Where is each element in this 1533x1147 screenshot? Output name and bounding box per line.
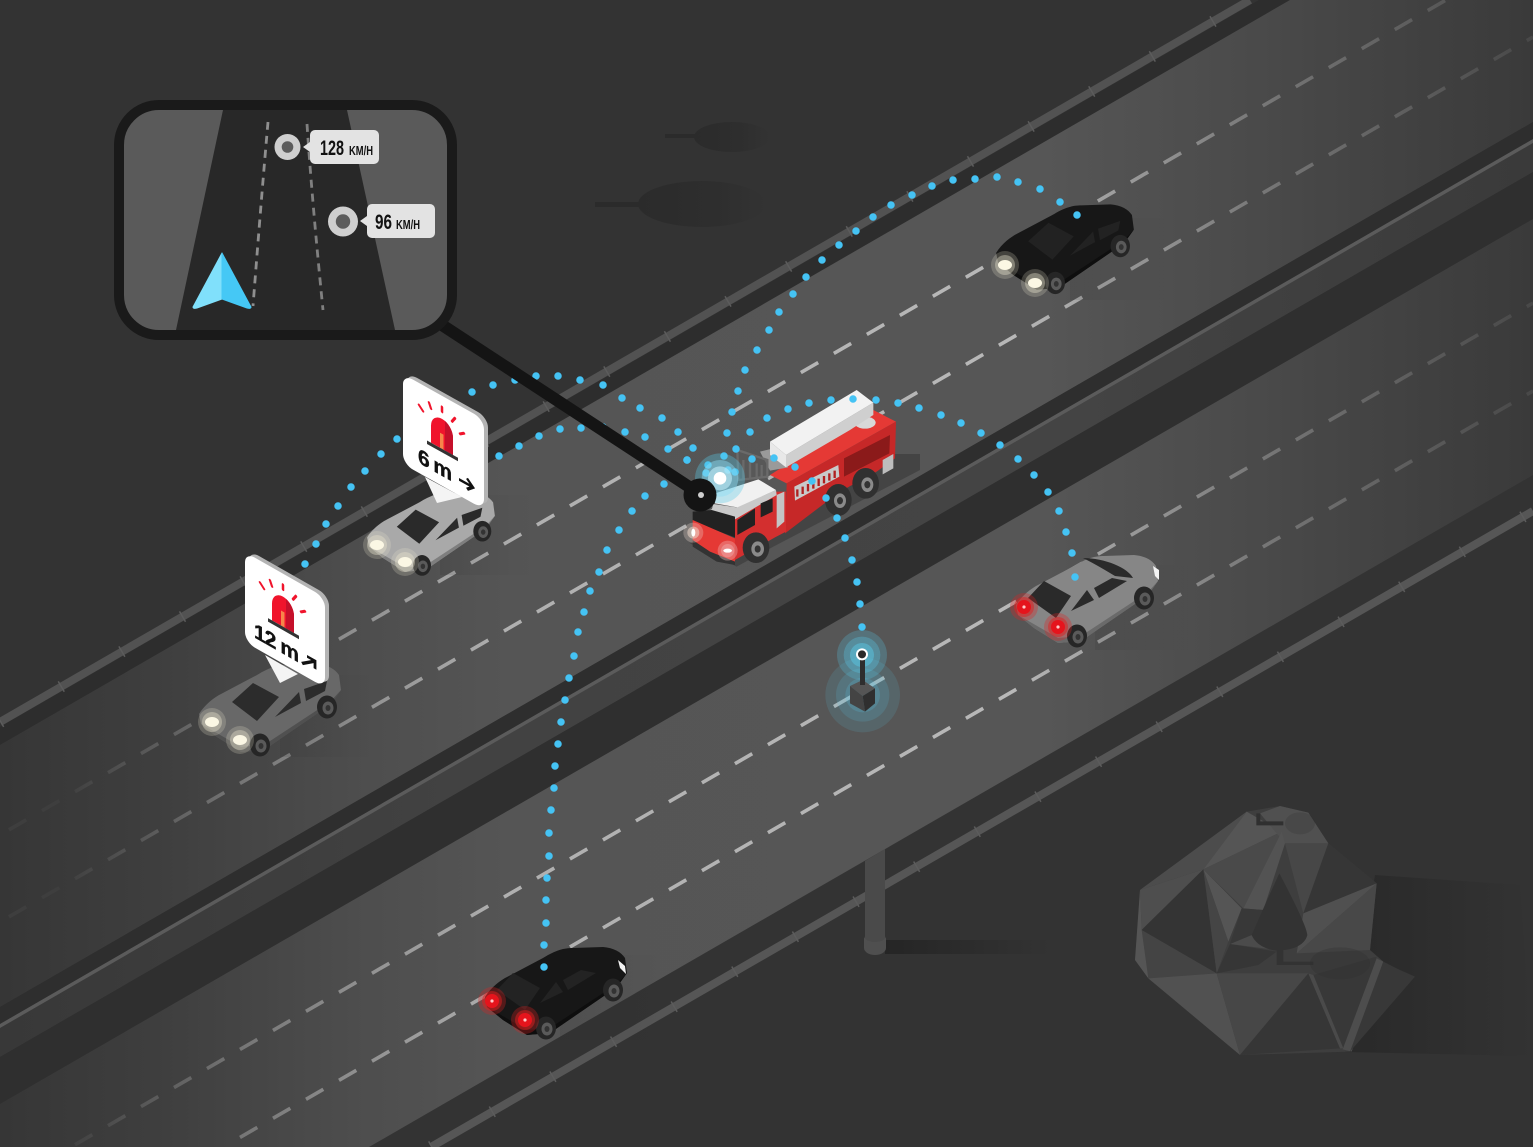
distance text: 6 m (418, 444, 452, 486)
dotted signal arc to antenna (735, 458, 862, 627)
mirror lane markings (253, 122, 268, 306)
cab roof (712, 490, 777, 519)
truck shadow (690, 454, 920, 567)
ladder (794, 465, 839, 501)
signal rings upper (837, 630, 887, 680)
direction arrow (302, 653, 315, 671)
navigation arrow (193, 253, 251, 308)
dotted signal arc to black car bottom (544, 460, 708, 967)
guard rail shadow band (0, 0, 1290, 745)
speed label 128 km/h (303, 130, 379, 164)
dotted signal arc to silver car under 6 m sign (499, 427, 706, 473)
truck emergency beacon glow (695, 453, 745, 503)
speed label 96 km/h (360, 204, 435, 238)
pointer (425, 477, 462, 503)
windscreen (693, 510, 735, 537)
car: silver with headlights, under 6 m sign (363, 492, 535, 576)
vehicle pin 96 (328, 206, 358, 236)
front wheel (743, 532, 769, 563)
bottom guard rail (431, 511, 1533, 1147)
speed label 96 km/h: 96 (375, 211, 392, 234)
top guard rail (0, 0, 1250, 722)
6 m alert sign (403, 370, 488, 512)
connector end point (684, 478, 716, 512)
direction arrow (459, 474, 473, 493)
truck headlights (683, 523, 738, 561)
vehicle pin 128 (274, 134, 300, 160)
side lockers (844, 435, 890, 477)
antenna roadside unit (825, 630, 900, 732)
dotted signal arc to grey car under 12 m sign (305, 376, 693, 564)
wheels (825, 468, 879, 516)
mirror road (176, 110, 395, 330)
body top (770, 410, 896, 483)
connector line from truck to mirror (442, 325, 700, 494)
cab front (693, 520, 735, 562)
boulder with tree silhouette (1135, 806, 1415, 1055)
door strip (777, 492, 784, 528)
dotted signal arc to silver car right (728, 399, 1075, 577)
tree shadows on the ground (595, 122, 770, 227)
boom arm (760, 390, 876, 471)
side windows (737, 508, 755, 535)
distance text: 12 m (254, 619, 299, 667)
car: black with headlights, top lane (991, 204, 1170, 300)
signal rings lower (825, 658, 900, 732)
body side (785, 422, 896, 533)
speed label 128 km/h: 128 (320, 137, 344, 160)
cab side (735, 492, 786, 560)
car: silver with tail lights, right lane (1010, 555, 1195, 650)
basket (737, 450, 767, 482)
fire truck (683, 390, 920, 567)
car: black with tail lights, bottom lane (478, 947, 665, 1040)
12 m alert sign (245, 548, 329, 690)
tree silhouette (1252, 873, 1313, 965)
speed label 96 km/h: KM/H (396, 218, 420, 232)
dotted signal arc to black car top (724, 177, 1077, 456)
speed label 128 km/h: KM/H (349, 144, 373, 158)
dashboard mirror display (119, 105, 452, 335)
car: grey with headlights, under 12 m sign (198, 664, 375, 757)
pointer (265, 655, 298, 683)
bridge pillar (864, 849, 1050, 955)
boulder shadow (1345, 875, 1533, 1056)
